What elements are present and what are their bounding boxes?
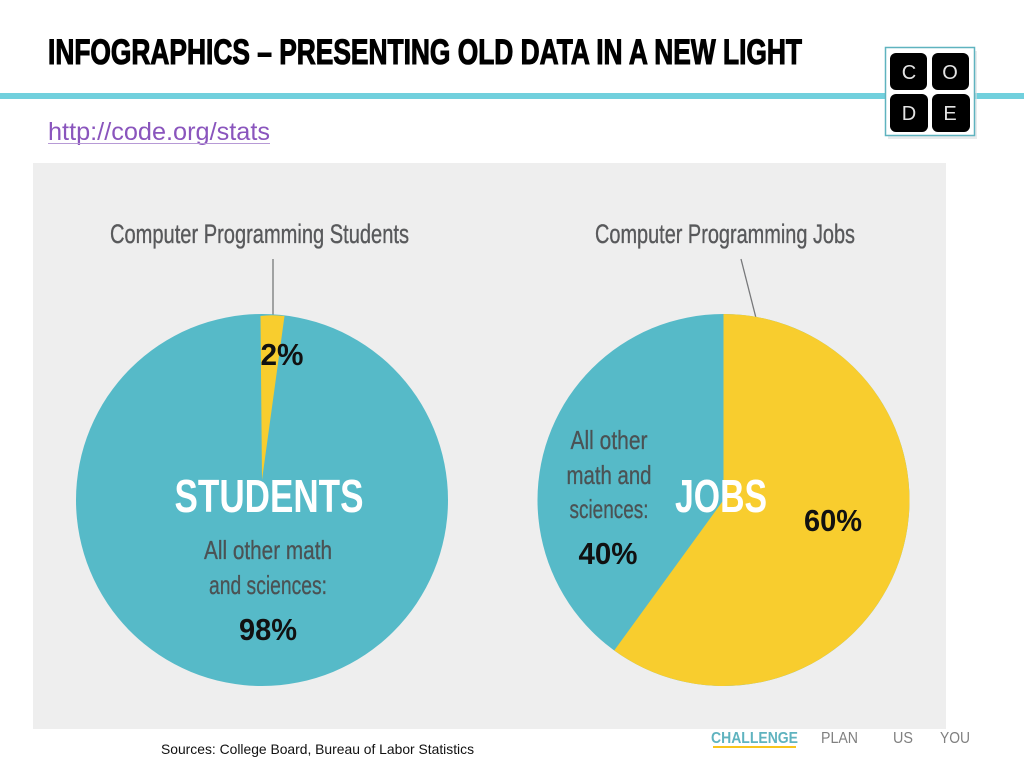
nav: plan: PLAN	[821, 730, 858, 747]
value: 40%: 40%	[578, 536, 638, 571]
navigation	[711, 730, 970, 748]
logo: code: D	[902, 103, 916, 125]
panel: chart background	[33, 163, 946, 729]
text: all other math and sciences: math and	[566, 460, 652, 490]
pie chart: students	[76, 314, 448, 686]
logo: code: E	[943, 103, 957, 125]
text: all other math and sciences: All other math	[204, 535, 332, 565]
text: all other math and sciences	[566, 425, 652, 524]
slice: programming jobs 60%	[614, 314, 909, 686]
pie chart: jobs	[538, 314, 910, 686]
label: computer programming jobs: Computer Programming Jobs	[595, 219, 855, 249]
label: computer programming students: Computer Programming Students	[110, 219, 409, 249]
slice: programming students 2%	[260, 315, 284, 480]
value: 98%: 98%	[239, 612, 297, 647]
title: INFOGRAPHICS – PRESENTING OLD DATA IN A NEW LIGHT	[48, 33, 802, 72]
sources note: Sources: College Board, Bureau of Labor Statistics	[161, 741, 474, 757]
nav: you: YOU	[940, 730, 970, 747]
label: students: STUDENTS	[174, 470, 364, 522]
text: all other math and sciences: sciences:	[570, 494, 648, 524]
value: 2%: 2%	[260, 337, 304, 372]
header rule	[0, 93, 1024, 99]
text: all other math and sciences: All other	[570, 425, 648, 455]
logo: code	[886, 48, 977, 139]
text: all other math and sciences: and sciences:	[209, 570, 327, 600]
logo: code: C	[902, 62, 916, 84]
link: stats url: http://code.org/stats	[48, 118, 270, 146]
logo: code: O	[942, 62, 958, 84]
label: jobs: JOBS	[675, 470, 767, 522]
leader line: jobs	[741, 259, 756, 318]
nav: us: US	[893, 730, 913, 747]
nav: challenge (active): CHALLENGE	[711, 730, 798, 747]
value: 60%: 60%	[804, 503, 862, 538]
text: all other math and sciences	[204, 535, 332, 600]
leader line: students	[272, 259, 274, 318]
